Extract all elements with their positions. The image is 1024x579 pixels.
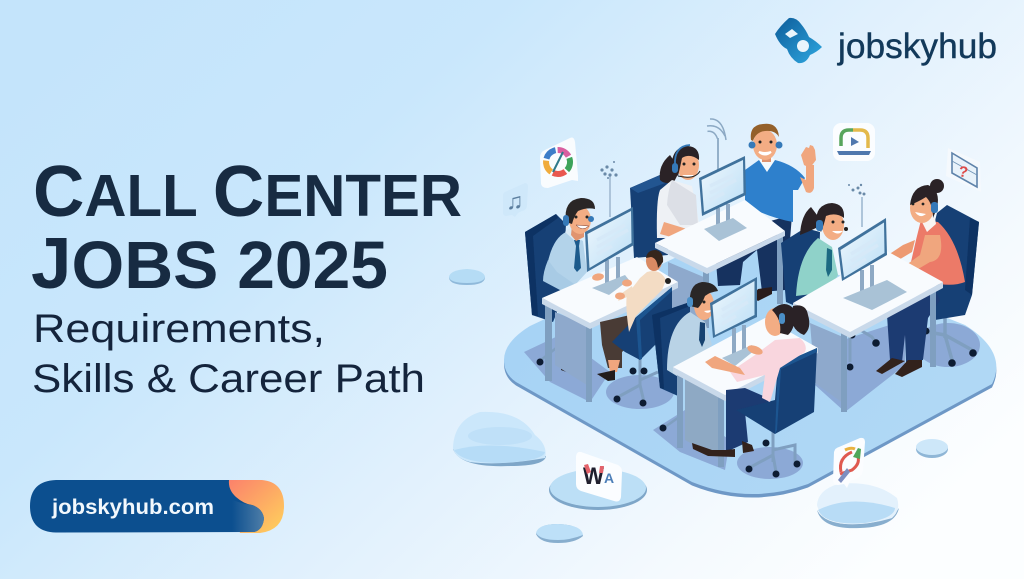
title line 2: JOBS 2025 bbox=[31, 224, 388, 304]
wheel bbox=[665, 415, 682, 427]
chair wheels bbox=[846, 325, 880, 370]
tie bbox=[699, 322, 705, 347]
legs bbox=[715, 215, 792, 292]
hands bbox=[821, 288, 839, 298]
chair wheel bbox=[541, 345, 560, 360]
floor shadows bbox=[524, 320, 980, 479]
logo wordmark: jobskyhub bbox=[837, 27, 997, 66]
person: seated in peach shirt bbox=[597, 250, 672, 406]
headset bbox=[687, 297, 693, 307]
monitor: front bbox=[710, 277, 757, 366]
desk: left bbox=[542, 257, 678, 402]
modesty panel bbox=[810, 323, 843, 403]
icon: logo mark bbox=[775, 18, 822, 63]
shoes bbox=[876, 358, 905, 374]
person: woman in pink bbox=[692, 304, 817, 478]
headset bbox=[816, 220, 823, 231]
monitor: back bbox=[699, 156, 747, 241]
headset bbox=[779, 313, 785, 324]
legs bbox=[703, 268, 709, 328]
antenna: dots right bbox=[848, 184, 866, 227]
ponytail bbox=[660, 155, 680, 183]
desk: back bbox=[655, 200, 785, 330]
website pill bbox=[30, 480, 284, 533]
headset bbox=[563, 215, 569, 226]
chair base bbox=[618, 358, 658, 402]
chair bbox=[612, 287, 672, 360]
far arm bbox=[867, 240, 915, 274]
arms bbox=[705, 356, 745, 375]
red top bbox=[908, 220, 965, 285]
modesty panel bbox=[555, 312, 587, 385]
legs bbox=[677, 372, 683, 448]
bun bbox=[930, 179, 944, 193]
face bbox=[677, 150, 699, 180]
leg bbox=[841, 330, 847, 412]
tie bbox=[826, 248, 832, 277]
website url: jobskyhub.com bbox=[51, 495, 214, 519]
subtitle line 1: Requirements, bbox=[33, 307, 325, 351]
ponytail bbox=[800, 207, 817, 235]
shirt bbox=[796, 238, 838, 296]
person: woman in red top bbox=[861, 179, 979, 367]
person: woman in white shirt bbox=[630, 145, 706, 258]
WA letters: W bbox=[583, 463, 604, 490]
icon: music note bubble bbox=[503, 183, 528, 217]
tie bbox=[574, 240, 581, 272]
desk top bbox=[655, 200, 785, 268]
modesty panel bbox=[668, 262, 706, 330]
chair bbox=[915, 205, 979, 320]
ponytail bbox=[793, 305, 809, 335]
red top woman legs bbox=[887, 290, 940, 362]
icon: arrow cycle bubble bbox=[833, 438, 865, 488]
head bbox=[646, 251, 662, 271]
icon: question sign card bbox=[946, 148, 981, 192]
antenna: dots left bbox=[600, 161, 618, 217]
icon: question sign card: ? bbox=[958, 163, 969, 181]
head bbox=[762, 150, 771, 162]
desk top bbox=[673, 318, 818, 395]
head bbox=[822, 210, 844, 240]
person: man in front bbox=[652, 282, 724, 396]
title line 1: CALL CENTER bbox=[33, 152, 462, 232]
legs bbox=[726, 388, 770, 452]
floating puddles bbox=[449, 269, 948, 543]
arm bbox=[660, 222, 706, 244]
icon: gear speech bubble bbox=[540, 138, 578, 188]
monitor: left bbox=[585, 207, 634, 295]
shirt bbox=[545, 232, 587, 285]
modesty panel bbox=[685, 378, 718, 458]
pill end highlight bbox=[232, 500, 264, 532]
blue shirt bbox=[745, 160, 805, 222]
chair bbox=[781, 228, 820, 308]
waving arm bbox=[800, 165, 814, 193]
shoes bbox=[561, 362, 590, 374]
legs bbox=[600, 315, 633, 368]
antenna: wifi signal bbox=[707, 119, 726, 172]
legs bbox=[545, 305, 552, 381]
shirt bbox=[657, 180, 700, 238]
hands bbox=[710, 347, 724, 355]
chair bbox=[652, 302, 690, 396]
head bbox=[910, 193, 934, 223]
desk top bbox=[793, 250, 943, 332]
chair base bbox=[928, 315, 972, 360]
head bbox=[694, 290, 714, 320]
right leg bbox=[930, 285, 936, 367]
icon: WA app card bbox=[576, 452, 622, 502]
head bbox=[765, 308, 785, 336]
monitor: right bbox=[838, 218, 907, 310]
shirt bbox=[626, 271, 666, 332]
illustration: call center desks bbox=[504, 119, 996, 498]
title bbox=[31, 152, 462, 304]
icon: music note bubble: ♫ bbox=[506, 188, 523, 214]
headset bbox=[672, 163, 678, 173]
chair base bbox=[749, 432, 795, 472]
person: standing man waving bbox=[715, 124, 816, 301]
desk top bbox=[542, 257, 678, 323]
near arm bbox=[888, 235, 941, 284]
shirt bbox=[667, 312, 712, 378]
chair bbox=[525, 214, 566, 322]
platform bbox=[504, 232, 996, 498]
icon: WA app card: A bbox=[604, 470, 614, 486]
person: woman in teal shirt bbox=[781, 203, 856, 308]
logo: jobskyhub bbox=[775, 18, 997, 66]
chair bbox=[630, 175, 668, 258]
icon: video laptop card bbox=[833, 123, 875, 161]
person: man with tie bbox=[525, 198, 595, 374]
shirt bbox=[730, 338, 806, 402]
subtitle bbox=[32, 307, 425, 401]
desk: front bbox=[660, 318, 818, 467]
head bbox=[571, 225, 584, 241]
chair bbox=[736, 348, 817, 434]
subtitle line 2: Skills & Career Path bbox=[32, 357, 425, 401]
desk: right bbox=[793, 250, 943, 412]
headset bbox=[931, 202, 938, 213]
